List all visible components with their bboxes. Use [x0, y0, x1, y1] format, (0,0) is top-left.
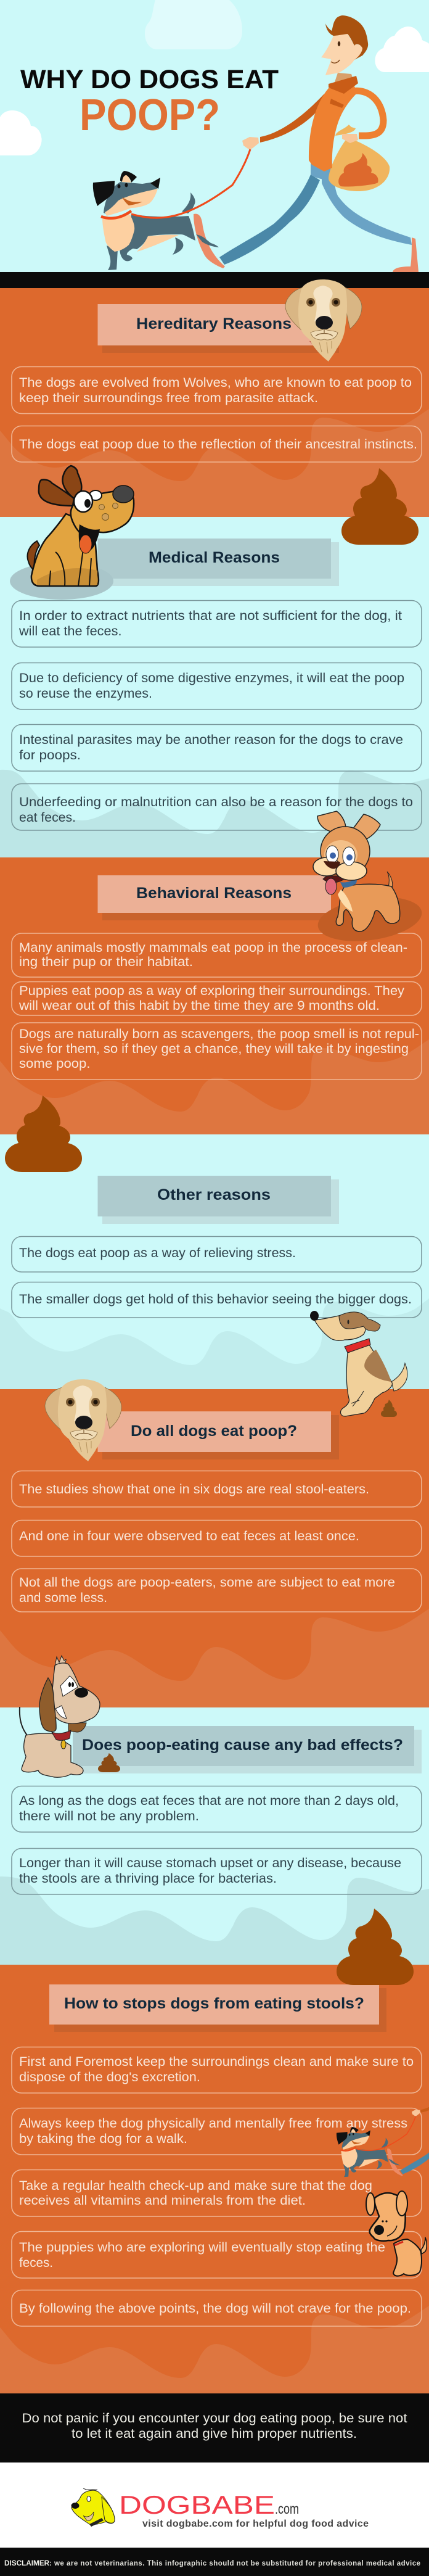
icon: right cloud: [375, 27, 429, 72]
text box: instincts: The dogs eat poop due to the reflection of their ancestral instincts.: [19, 437, 417, 452]
illustration: brown puppy with tongue out: [10, 466, 134, 600]
logo band: [0, 2462, 429, 2548]
text box: stress: [12, 1236, 422, 1272]
text box: puppies: Puppies eat poop as a way of exploring their surroundings. They: [19, 984, 405, 998]
icon: golden dog head, do all dogs: [45, 1379, 121, 1461]
panel: behavioral reasons: [0, 857, 429, 1134]
text box: two days: [12, 1786, 422, 1832]
text box: puppies stop: [12, 2232, 422, 2278]
heading: Medical Reasons: [97, 539, 339, 586]
text box: enzymes: Due to deficiency of some digestive enzymes, it will eat the poop: [19, 671, 404, 685]
text box: cleaning: [12, 933, 422, 977]
text box: scavengers: sive for them, so if they get a chance, they will take it by ingesting: [19, 1042, 409, 1056]
illustration: big-headed orange pup: [366, 2191, 427, 2276]
text box: parasites: for poops.: [19, 748, 81, 762]
text box: enzymes: so reuse the enzymes.: [19, 687, 152, 701]
panel: other reasons: [0, 1134, 429, 1389]
heading: Other reasons: Other reasons: [157, 1186, 271, 1203]
text box: malnutrition: Underfeeding or malnutrition can also be a reason for the dogs to: [19, 795, 413, 809]
text box: walk: [12, 2108, 422, 2155]
illustration: man walking dog with poop bag: [93, 15, 419, 272]
text box: one in four: [12, 1520, 422, 1556]
text box: scavengers: some poop.: [19, 1057, 90, 1071]
text box: scavengers: [12, 1023, 422, 1080]
text box: walk: by taking the dog for a walk.: [19, 2132, 187, 2146]
panel: hero header: [0, 0, 429, 272]
panel: medical reasons: [0, 517, 429, 857]
heading: how to stop: [49, 1984, 386, 2032]
text box: one in four: And one in four were observed to eat feces at least once.: [19, 1529, 359, 1543]
logo band: .com: [275, 2501, 299, 2517]
disclaimer band: DISCLAIMER:: [4, 2559, 52, 2567]
text box: health check: receives all vitamins and minerals from the diet.: [19, 2194, 306, 2208]
text box: health check: [12, 2170, 422, 2216]
text box: stress: The dogs eat poop as a way of relieving stress.: [19, 1246, 296, 1260]
icon: yellow dog logo: [72, 2488, 115, 2527]
text box: following points: By following the above points, the dog will not crave for the poop.: [19, 2301, 411, 2316]
text box: puppies stop: The puppies who are exploring will eventually stop eating the: [19, 2240, 385, 2255]
text box: puppies stop: feces.: [19, 2256, 53, 2270]
text box: bacteria: Longer than it will cause stomach upset or any disease, because: [19, 1856, 401, 1870]
heading: bad effects: Does poop-eating cause any bad effects?: [82, 1736, 403, 1754]
heading: Other reasons: [97, 1176, 339, 1224]
text box: health check: Take a regular health check-up and make sure that the dog: [19, 2179, 372, 2193]
text box: clean surroundings: dispose of the dog's excretion.: [19, 2070, 200, 2084]
panel: bad effects: [0, 1707, 429, 1965]
text box: following points: [12, 2290, 422, 2326]
text box: clean surroundings: First and Foremost keep the surroundings clean and make sure to: [19, 2055, 414, 2069]
text box: wolves: keep their surroundings free from parasite attack.: [19, 391, 318, 405]
icon: poop, how to stop: [337, 1909, 414, 1985]
text box: one in six: The studies show that one in six dogs are real stool-eaters.: [19, 1482, 369, 1496]
text box: scavengers: Dogs are naturally born as scavengers, the poop smell is not repul-: [19, 1027, 419, 1041]
icon: small poop, other reasons: [381, 1400, 397, 1417]
title: POOP?: [80, 91, 220, 140]
title: [20, 65, 279, 140]
text box: instincts: [12, 426, 422, 462]
disclaimer band: we are not veterinarians. This infographic should not be substituted for professional medical advice: [54, 2560, 420, 2567]
text box: nutrients: will eat the feces.: [18, 624, 121, 638]
disclaimer band: [0, 2548, 429, 2576]
closing message band: [0, 2393, 429, 2462]
text box: smaller dogs: [12, 1282, 422, 1318]
heading: Behavioral Reasons: [97, 875, 339, 920]
icon: golden dog head, hereditary: [285, 279, 362, 361]
illustration: beagle with tuft: [20, 1656, 100, 1777]
text box: malnutrition: eat feces.: [19, 811, 76, 825]
logo band: DOGBABE: [119, 2490, 275, 2519]
icon: left cloud: [0, 110, 42, 155]
heading: Behavioral Reasons: Behavioral Reasons: [136, 885, 292, 902]
text box: one in six: [12, 1471, 422, 1507]
heading: Do all dogs eat poop: [97, 1411, 339, 1459]
text box: nutrients: [12, 601, 422, 647]
text box: parasites: Intestinal parasites may be another reason for the dogs to crave: [19, 733, 403, 747]
text box: bacteria: [12, 1848, 422, 1894]
panel: how to stop: [0, 1965, 429, 2393]
illustration: tan puppy standing: [313, 811, 425, 947]
heading: Hereditary Reasons: Hereditary Reasons: [136, 315, 292, 332]
divider band: [0, 272, 429, 288]
illustration: spotted dog sitting: [310, 1311, 407, 1416]
text box: bacteria: the stools are a thriving place for bacterias.: [19, 1872, 277, 1886]
text box: wolves: The dogs are evolved from Wolves, who are known to eat poop to: [19, 376, 412, 390]
heading: Medical Reasons: Medical Reasons: [149, 549, 280, 566]
text box: not all dogs: and some less.: [19, 1591, 107, 1605]
text box: parasites: [12, 724, 422, 771]
closing message band: Do not panic if you encounter your dog eating poop, be sure not: [22, 2411, 407, 2425]
text box: puppies: [12, 982, 422, 1015]
text box: not all dogs: Not all the dogs are poop-eaters, some are subject to eat more: [19, 1575, 395, 1590]
icon: pale cloud: [145, 0, 242, 49]
text box: walk: Always keep the dog physically and mentally free from any stress: [19, 2116, 407, 2131]
icon: poop, hereditary: [341, 468, 419, 545]
logo band: visit dogbabe.com for helpful dog food advice: [142, 2519, 369, 2529]
text box: malnutrition: [12, 783, 422, 830]
heading: bad effects: [73, 1726, 422, 1773]
title: WHY DO DOGS EAT: [20, 65, 279, 94]
heading: Do all dogs eat poop: Do all dogs eat poop?: [131, 1422, 297, 1440]
text box: smaller dogs: The smaller dogs get hold of this behavior seeing the bigger dogs.: [19, 1292, 412, 1307]
heading: how to stop: How to stops dogs from eating stools?: [64, 1995, 364, 2012]
text box: cleaning: ing their pup or their habitat.: [19, 955, 193, 969]
icon: small poop, bad effects: [98, 1753, 120, 1772]
text box: two days: As long as the dogs eat feces that are not more than 2 days old,: [19, 1794, 399, 1808]
panel: hereditary reasons: [0, 288, 429, 517]
text box: puppies: will wear out of this habit by the time they are 9 months old.: [18, 999, 380, 1013]
text box: two days: there will not be any problem.: [19, 1809, 199, 1823]
closing message band: to let it eat again and give him proper nutrients.: [72, 2427, 357, 2441]
icon: poop, behavioral: [5, 1096, 82, 1172]
panel: do all dogs eat poop: [0, 1389, 429, 1707]
illustration: small man and dog walking: [337, 2049, 429, 2178]
text box: not all dogs: [12, 1569, 422, 1612]
text box: clean surroundings: [12, 2047, 422, 2093]
text box: nutrients: In order to extract nutrients that are not sufficient for the dog, it: [19, 609, 402, 623]
text box: wolves: [12, 366, 422, 413]
heading: Hereditary Reasons: [97, 304, 339, 353]
text box: enzymes: [12, 663, 422, 709]
text box: cleaning: Many animals mostly mammals eat poop in the process of clean-: [19, 941, 407, 955]
